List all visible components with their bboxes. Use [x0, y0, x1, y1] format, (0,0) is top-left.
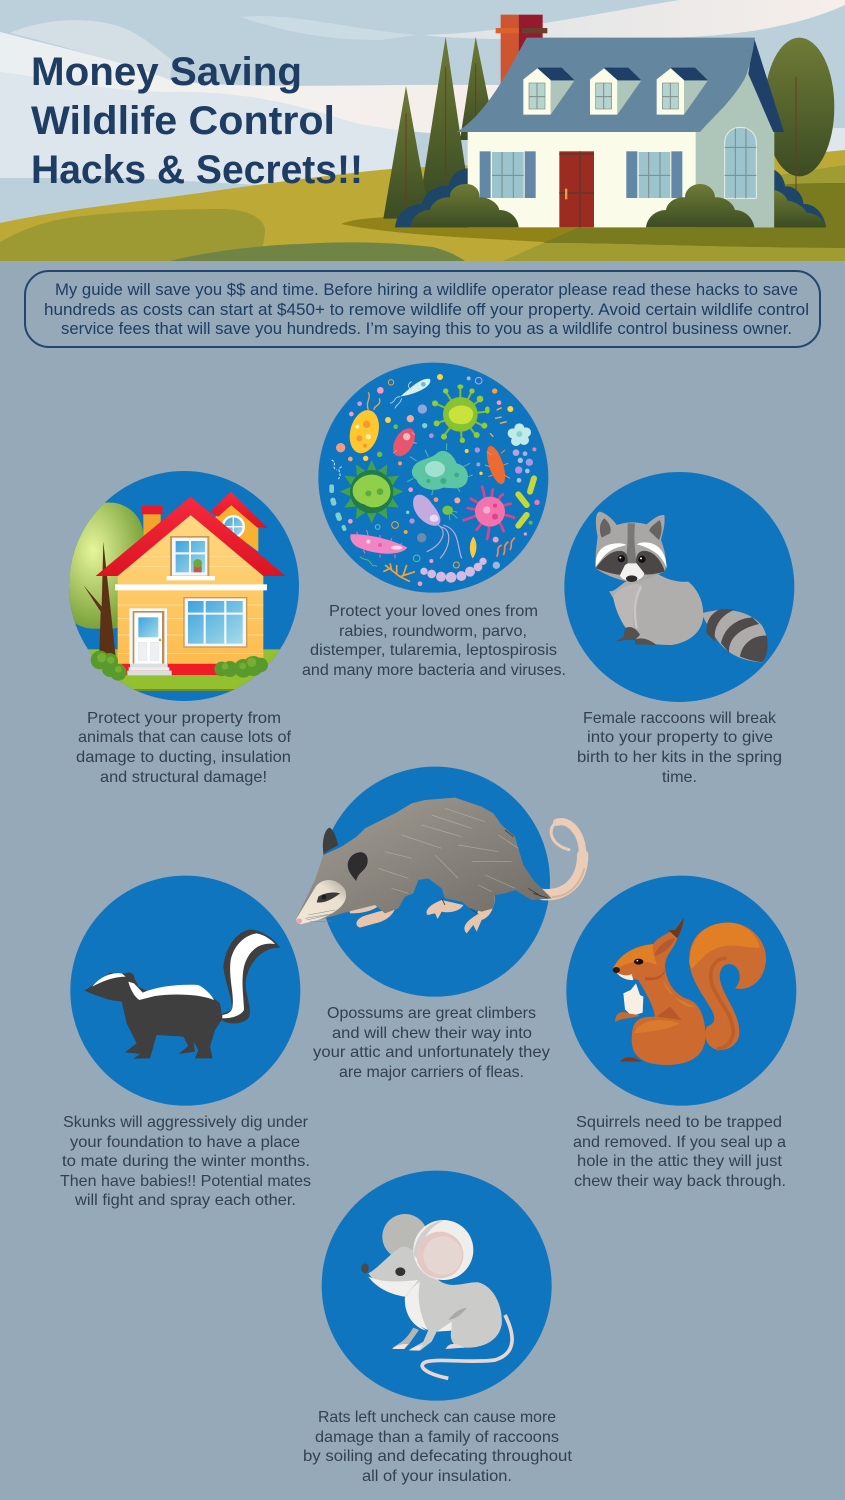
caption: bacteria: Protect your loved ones from [329, 603, 538, 620]
icon: squirrel [566, 876, 796, 1106]
caption: opossum [313, 1005, 550, 1081]
door [559, 151, 594, 227]
caption: property [76, 710, 292, 786]
intro callout box: My guide will save you $$ and time. Before hiring a wildlife operator please read these hacks to save [55, 281, 798, 299]
caption: raccoon: Female raccoons will break [583, 710, 777, 727]
icon: yellow house [60, 471, 303, 701]
pearls [420, 558, 487, 583]
icon: mouse [322, 1171, 552, 1401]
side wall [695, 72, 774, 227]
bushes [395, 168, 826, 227]
caption: bacteria: and many more bacteria and viruses. [302, 662, 566, 679]
roof [96, 497, 286, 576]
caption: squirrel: and removed. If you seal up a [573, 1134, 786, 1151]
caption: bacteria [302, 603, 566, 679]
capsules left [329, 484, 347, 532]
upper window [170, 536, 209, 577]
icon: opossum [296, 767, 584, 997]
panel: opossum [296, 767, 584, 1081]
caption: skunk: your foundation to have a place [70, 1134, 300, 1151]
green rods [518, 494, 527, 505]
fur streaks [378, 808, 518, 893]
band [115, 584, 267, 590]
teal blob [412, 451, 468, 490]
red rod [389, 425, 419, 460]
caption: property: Protect your property from [87, 710, 281, 727]
arm and foot [615, 1012, 640, 1022]
caption: raccoon: time. [662, 769, 697, 786]
near ear [413, 1220, 473, 1280]
feet [427, 900, 463, 919]
icon: raccoon [564, 472, 794, 702]
panel: bacteria [302, 363, 566, 679]
title: Money Saving [31, 50, 302, 94]
intro callout box [25, 271, 820, 347]
door [129, 608, 167, 665]
yellow oval [367, 392, 380, 410]
panel: rat [303, 1171, 573, 1485]
green virus [435, 387, 487, 441]
caption: raccoon: birth to her kits in the spring [577, 749, 782, 766]
intro callout box: hundreds as costs can start at $450+ to remove wildlife off your property. Avoid certain wildlife control [44, 301, 809, 319]
far ear [382, 1214, 428, 1259]
caption: raccoon [577, 710, 782, 786]
tail [542, 822, 583, 895]
caption: squirrel: chew their way back through. [574, 1173, 786, 1190]
caption: bacteria: rabies, roundworm, parvo, [339, 623, 527, 640]
back gable [213, 505, 258, 552]
panel: property [60, 471, 303, 786]
caption: skunk: Skunks will aggressively dig under [63, 1114, 309, 1131]
caption: skunk: Then have babies!! Potential mates [60, 1173, 311, 1190]
coloured dots [336, 374, 540, 586]
tail [689, 923, 766, 1050]
caption: squirrel [573, 1114, 786, 1190]
wall [118, 515, 263, 663]
caption: bacteria: distemper, tularemia, leptospirosis [310, 642, 557, 659]
caption: rat: Rats left uncheck can cause more [318, 1409, 556, 1426]
ears [323, 828, 338, 854]
head [596, 512, 666, 582]
body [613, 917, 706, 1065]
body [296, 798, 552, 924]
orange coral [383, 563, 415, 582]
title: Hacks & Secrets!! [31, 148, 363, 192]
caption: skunk: to mate during the winter months. [62, 1153, 310, 1170]
bushes [91, 651, 268, 681]
icon: bacteria and viruses [318, 363, 548, 593]
caption: opossum: your attic and unfortunately they [313, 1044, 550, 1061]
caption: opossum: are major carriers of fleas. [339, 1064, 524, 1081]
yellow drop [470, 537, 476, 558]
header banner [0, 0, 845, 261]
title [31, 50, 363, 192]
panel: squirrel [566, 876, 796, 1190]
caption: property: animals that can cause lots of [78, 729, 292, 746]
face [296, 880, 346, 924]
roof [457, 38, 784, 132]
caption: skunk [60, 1114, 311, 1209]
pink spiky [463, 486, 515, 540]
house illustration [383, 15, 834, 227]
body [609, 574, 703, 645]
small cyan microbe [400, 379, 430, 397]
pink rod [357, 530, 402, 558]
caption: rat: damage than a family of raccoons [315, 1429, 559, 1446]
purple microbe [427, 525, 462, 558]
caption: rat [303, 1409, 573, 1485]
chest and muzzle [623, 983, 643, 1016]
front paws [616, 627, 657, 645]
cyan flower [508, 423, 531, 446]
front windows and shutters [480, 151, 682, 198]
icon: skunk [70, 876, 300, 1106]
small green [442, 506, 453, 515]
tail [422, 1315, 512, 1378]
caption: rat: all of your insulation. [362, 1468, 512, 1485]
caption: skunk: will fight and spray each other. [74, 1192, 296, 1209]
caption: rat: by soiling and defecating throughout [303, 1448, 573, 1465]
hills [0, 150, 845, 261]
chimney [143, 513, 161, 537]
caption: raccoon: into your property to give [587, 729, 773, 746]
chimney [496, 15, 547, 85]
caption: property: and structural damage! [100, 769, 267, 786]
caption: squirrel: Squirrels need to be trapped [576, 1114, 782, 1131]
orange rod [483, 444, 509, 486]
caption: property: damage to ducting, insulation [76, 749, 291, 766]
arched window [725, 127, 756, 198]
caption: squirrel: hole in the attic they will just [577, 1153, 783, 1170]
face [361, 1263, 369, 1273]
front wall [468, 132, 696, 227]
caption: opossum: and will chew their way into [332, 1025, 532, 1042]
dormer windows [523, 68, 708, 115]
lower window [183, 597, 247, 648]
intro callout box: service fees that will save you hundreds. I’m saying this to you as a wildlife control business owner. [61, 320, 792, 338]
caption: opossum: Opossums are great climbers [327, 1005, 536, 1022]
body [368, 1247, 502, 1351]
trees [383, 37, 834, 219]
title: Wildlife Control [31, 99, 335, 143]
red base and steps [122, 664, 222, 675]
tail [702, 610, 767, 662]
panel: raccoon [564, 472, 794, 786]
dark green spiky [340, 460, 403, 523]
panel: skunk [60, 876, 311, 1209]
